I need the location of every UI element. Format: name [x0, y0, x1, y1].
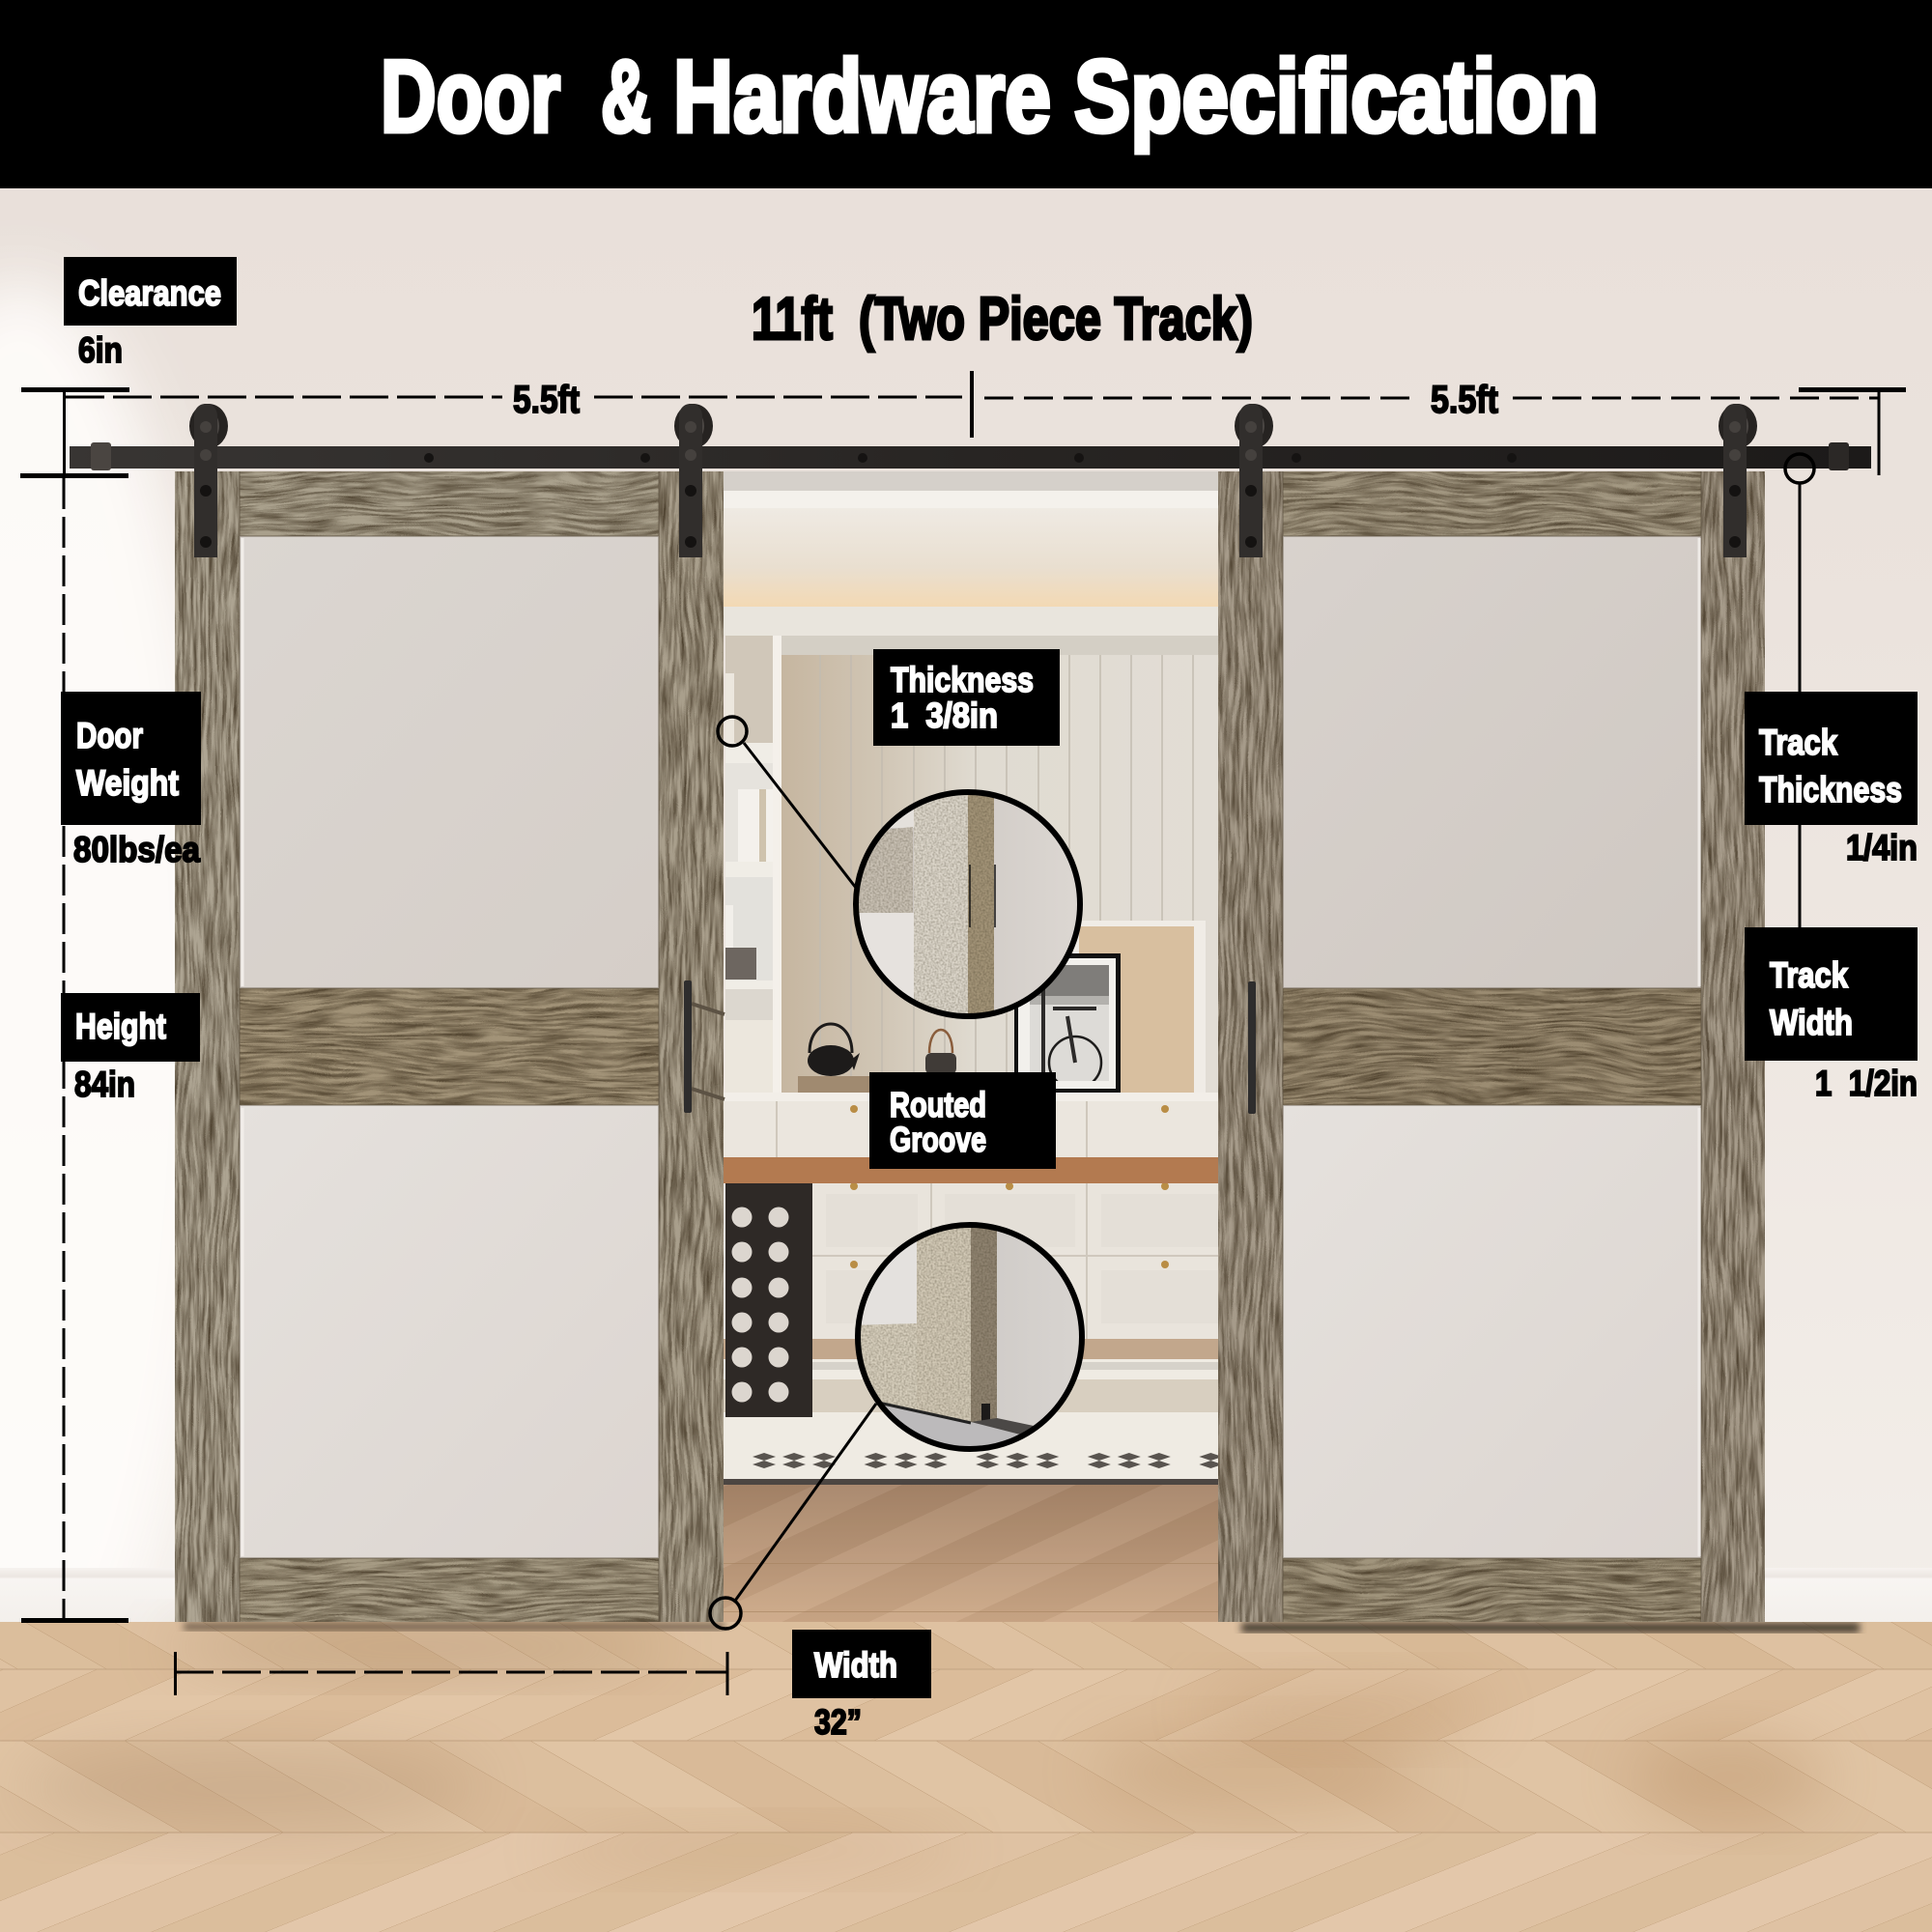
right stile [1701, 471, 1765, 1622]
track stopper: left [91, 442, 111, 470]
thickness label: 1 3/8in [891, 696, 998, 735]
track thickness label: Track [1759, 723, 1837, 762]
hanger 1 [189, 404, 228, 557]
door: left [175, 471, 724, 1622]
glass panel upper [240, 536, 659, 988]
track width label: Width [1770, 1003, 1853, 1042]
track length heading: 11ft (Two Piece Track) [752, 286, 1253, 353]
track width label [1745, 927, 1918, 1061]
hanger 2 [674, 404, 713, 557]
bookcase [725, 636, 781, 1099]
glass panel lower [240, 1105, 659, 1558]
middle rail [1283, 988, 1701, 1105]
clearance label [64, 257, 237, 326]
bottom rail [1283, 1558, 1701, 1622]
floor: chevron parquet [0, 1622, 1932, 1932]
hanger 4 [1719, 404, 1757, 557]
routed groove pointer [710, 1404, 876, 1629]
left stile [1218, 471, 1283, 1622]
thickness label [873, 649, 1060, 746]
dimension: door width [174, 1652, 728, 1695]
title banner [0, 0, 1932, 188]
cabinets [724, 1093, 1218, 1340]
track thickness value: 1/4in [1846, 828, 1918, 867]
track thickness pointer [1785, 454, 1814, 927]
width label: Width [814, 1645, 897, 1685]
floor [850, 1391, 1092, 1459]
floor shadow [971, 1418, 1034, 1435]
door weight label [61, 692, 201, 825]
height label [61, 993, 200, 1062]
routed groove magnifier [850, 1217, 1092, 1459]
dimension: door height [21, 478, 128, 1623]
routed groove label [869, 1072, 1056, 1169]
interior room seen through the opening [724, 471, 1218, 1622]
label 5.5ft right: 5.5ft [1431, 379, 1498, 421]
label 5.5ft left: 5.5ft [513, 379, 580, 421]
barn door track [70, 446, 1871, 469]
floor behind rug [724, 1339, 1218, 1360]
glass panel upper [1283, 536, 1701, 988]
height label: Height [75, 1007, 166, 1046]
thickness marks [970, 865, 995, 927]
hanger 3 [1235, 404, 1273, 557]
stile face [917, 1217, 971, 1422]
center tick [970, 371, 974, 438]
thickness pointer [718, 717, 856, 888]
right stile [659, 471, 724, 1622]
title: & [601, 40, 651, 154]
height value: 84in [74, 1065, 135, 1104]
clearance value: 6in [78, 330, 123, 370]
leaning art [1073, 921, 1206, 1093]
track stopper: right [1829, 442, 1849, 470]
clearance label: Clearance [78, 273, 221, 313]
ceiling and light [724, 471, 1218, 607]
baseboard [0, 1568, 1932, 1623]
thickness magnifier [850, 787, 1082, 1019]
bottom rail [240, 1558, 659, 1622]
right end bracket [1799, 387, 1906, 475]
handle: left door [684, 980, 724, 1113]
rug [724, 1359, 1218, 1485]
glass panel lower [1283, 1105, 1701, 1558]
routed groove label: Groove [890, 1120, 986, 1159]
door shadows on floor [184, 1623, 1860, 1633]
small tea kettle [925, 1030, 956, 1074]
routed groove label: Routed [890, 1085, 986, 1124]
stile edge [968, 787, 994, 1019]
title [381, 40, 1599, 154]
title: Hardware [673, 40, 1051, 154]
handle: right door [1248, 981, 1256, 1114]
track width label: Track [1770, 955, 1848, 995]
framed bicycle photo [1014, 953, 1121, 1093]
wooden floor in room [724, 1485, 1218, 1622]
rail end [861, 1323, 917, 1409]
clearance dimension bracket [20, 387, 129, 478]
groove notch [981, 1404, 990, 1420]
middle rail [240, 988, 659, 1105]
track thickness label: Thickness [1759, 770, 1902, 810]
track thickness label [1745, 692, 1918, 825]
title: Door [381, 40, 560, 154]
width label [792, 1630, 931, 1698]
top rail [1283, 471, 1701, 536]
door weight label: Weight [76, 763, 179, 803]
table leg with holes [725, 1183, 812, 1417]
title: Specification [1074, 40, 1599, 154]
stile face [914, 787, 968, 1019]
thickness label: Thickness [891, 660, 1034, 699]
stile edge with groove [971, 1217, 997, 1422]
teapot [798, 1024, 877, 1094]
top rail [240, 471, 659, 536]
wooden countertop [724, 1157, 1218, 1183]
door: right [1218, 471, 1765, 1622]
door weight label: Door [76, 716, 143, 755]
rail end [855, 827, 913, 913]
panelled back wall [781, 636, 1218, 1099]
left stile [175, 471, 240, 1622]
width value: 32” [814, 1702, 862, 1742]
door weight value: 80lbs/ea [73, 830, 200, 869]
